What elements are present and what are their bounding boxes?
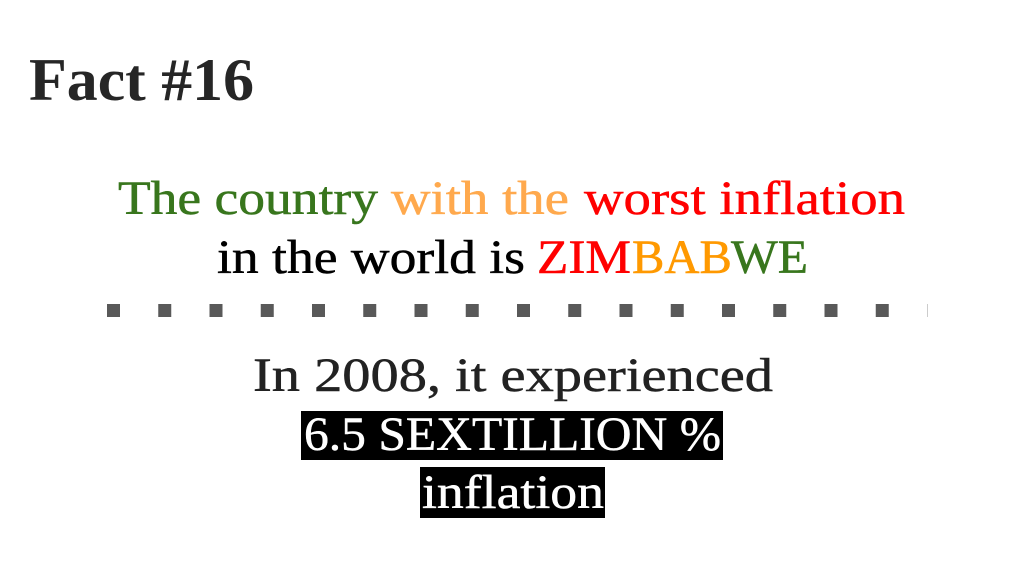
body line: In 2008, it experienced	[253, 349, 773, 402]
headline line 2	[217, 231, 808, 284]
headline line 2: in the world is	[217, 231, 525, 284]
headline line 2: WE	[731, 231, 808, 284]
headline line 2: BAB	[632, 231, 732, 284]
highlighted figure: 6.5 SEXTILLION %	[304, 408, 721, 461]
headline line 1	[118, 172, 905, 225]
highlighted word: inflation	[422, 466, 604, 519]
title: Fact #16	[29, 47, 254, 113]
headline line 2: ZIM	[537, 231, 631, 284]
dotted divider	[107, 304, 928, 317]
headline line 1: The country	[118, 172, 378, 225]
headline line 1: worst inflation	[584, 172, 905, 225]
headline line 1: with the	[391, 172, 569, 225]
